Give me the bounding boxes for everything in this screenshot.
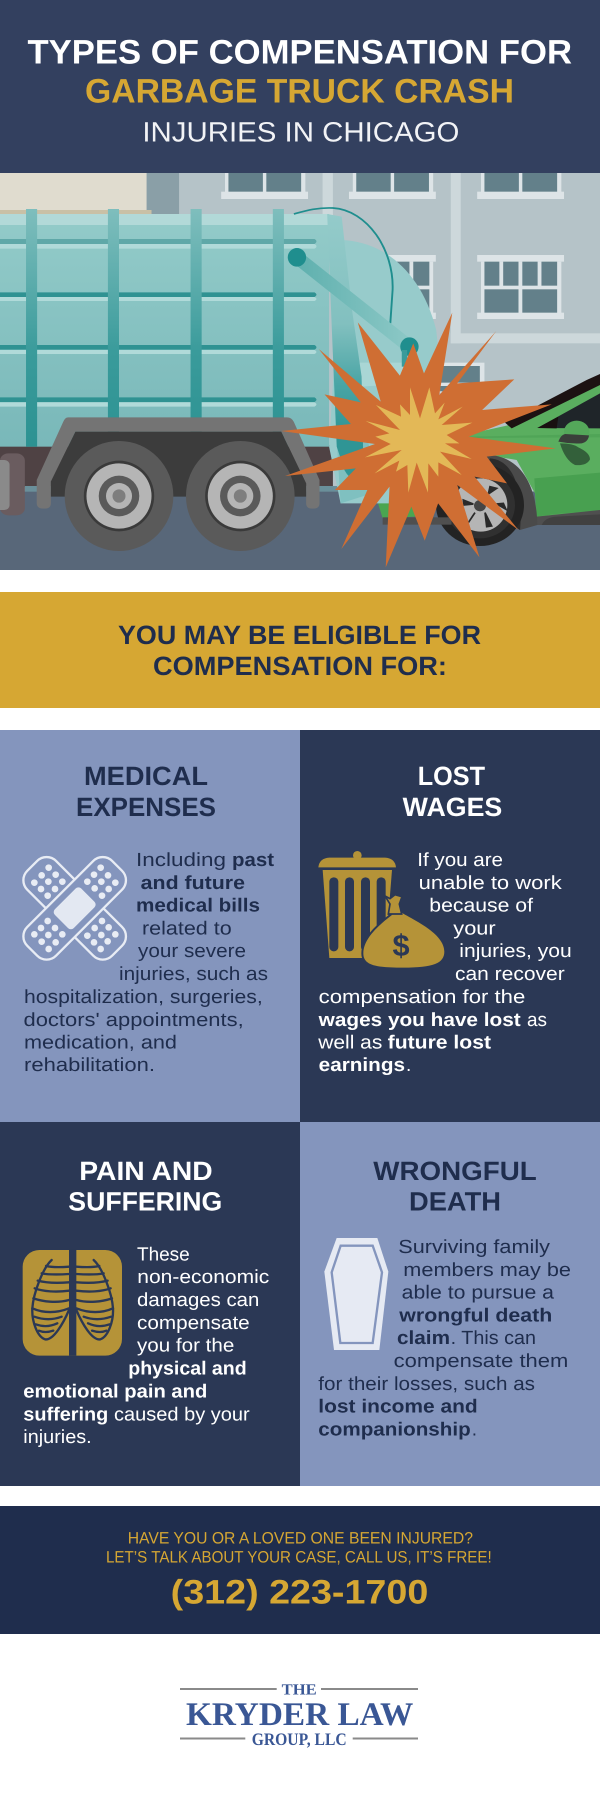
title: GARBAGE TRUCK CRASH bbox=[85, 73, 514, 111]
panel: wrongful death bbox=[300, 1122, 600, 1486]
heading: pain and suffering: SUFFERING bbox=[68, 1187, 222, 1217]
body text: pain and suffering bbox=[23, 1244, 269, 1448]
eligibility banner bbox=[0, 592, 600, 708]
logo: The Kryder Law Group, LLC: KRYDER LAW bbox=[186, 1697, 413, 1733]
heading: wrongful death bbox=[373, 1156, 537, 1217]
building facade and windows bbox=[0, 173, 600, 570]
body text: medical expenses: related to bbox=[142, 918, 232, 939]
body text: lost wages: wages you have lost bbox=[318, 1010, 521, 1031]
icon: trash can and money bag bbox=[318, 851, 444, 968]
body text: lost wages: your bbox=[453, 918, 496, 939]
heading: medical expenses: EXPENSES bbox=[76, 792, 216, 822]
body text: lost wages: because of bbox=[429, 896, 534, 917]
title bbox=[28, 33, 572, 148]
heading: lost wages bbox=[403, 761, 502, 822]
logo: The Kryder Law Group, LLC bbox=[180, 1681, 418, 1749]
call to action panel bbox=[0, 1506, 600, 1634]
icon: trash can and money bag: $ bbox=[392, 929, 410, 963]
body text: lost wages: compensation for the bbox=[319, 987, 525, 1008]
body text: medical expenses: medical bills bbox=[136, 896, 260, 917]
icon: rib cage bbox=[23, 1250, 122, 1356]
title: INJURIES IN CHICAGO bbox=[142, 117, 459, 148]
panel: medical expenses bbox=[0, 730, 300, 1122]
body text: pain and suffering: you for the bbox=[137, 1336, 234, 1357]
road bbox=[0, 492, 600, 570]
body text: pain and suffering: physical and bbox=[128, 1359, 247, 1380]
body text: wrongful death: companionship bbox=[318, 1419, 471, 1440]
body text: pain and suffering: caused by your bbox=[114, 1404, 250, 1425]
body text: medical expenses: rehabilitation. bbox=[24, 1055, 155, 1076]
body text: wrongful death: for their losses, such as bbox=[318, 1374, 535, 1395]
body text: lost wages: If you are bbox=[417, 850, 503, 871]
logo: The Kryder Law Group, LLC: GROUP, LLC bbox=[252, 1729, 347, 1749]
body text: medical expenses: medication, and bbox=[24, 1033, 177, 1054]
panel: pain and suffering bbox=[0, 1122, 300, 1486]
heading: wrongful death: DEATH bbox=[409, 1187, 501, 1217]
body text: pain and suffering: damages can bbox=[137, 1290, 259, 1311]
body text: medical expenses: hospitalization, surgeries, bbox=[24, 987, 263, 1008]
body text: wrongful death: . bbox=[472, 1419, 477, 1440]
heading: lost wages: LOST bbox=[418, 761, 485, 791]
body text: wrongful death: . This can bbox=[451, 1328, 536, 1349]
body text: wrongful death: lost income and bbox=[318, 1397, 478, 1418]
heading: wrongful death: WRONGFUL bbox=[373, 1156, 537, 1186]
eligibility banner: YOU MAY BE ELIGIBLE FOR bbox=[118, 620, 481, 650]
explosion burst outer bbox=[281, 313, 556, 567]
garbage truck bbox=[0, 208, 439, 551]
call to action text: HAVE YOU OR A LOVED ONE BEEN INJURED? bbox=[128, 1529, 473, 1547]
body text: pain and suffering: compensate bbox=[137, 1313, 250, 1334]
phone number: (312) 223-1700 bbox=[171, 1573, 428, 1611]
body text: medical expenses: injuries, such as bbox=[119, 964, 268, 985]
body text: medical expenses: past bbox=[232, 850, 275, 871]
body text: medical expenses: your severe bbox=[138, 941, 246, 962]
body text: lost wages bbox=[317, 850, 572, 1076]
body text: lost wages: future lost bbox=[388, 1033, 492, 1054]
body text: pain and suffering: suffering bbox=[23, 1404, 108, 1425]
eligibility banner: COMPENSATION FOR: bbox=[153, 651, 447, 681]
heading: pain and suffering bbox=[68, 1156, 222, 1217]
hero illustration: garbage truck crash bbox=[0, 173, 600, 570]
body text: wrongful death: compensate them bbox=[394, 1351, 568, 1372]
car front bumper bbox=[378, 498, 452, 525]
heading: pain and suffering: PAIN AND bbox=[79, 1156, 213, 1186]
body text: lost wages: as bbox=[527, 1010, 547, 1031]
title: TYPES OF COMPENSATION FOR bbox=[28, 33, 572, 71]
panel: lost wages bbox=[300, 730, 600, 1122]
icon: crossed bandages bbox=[18, 852, 131, 965]
call to action text bbox=[106, 1529, 492, 1566]
header panel bbox=[0, 0, 600, 173]
heading: lost wages: WAGES bbox=[403, 792, 502, 822]
body text: lost wages: well as bbox=[317, 1033, 382, 1054]
body text: medical expenses: doctors' appointments, bbox=[24, 1010, 244, 1031]
body text: lost wages: injuries, you bbox=[459, 941, 572, 962]
logo: The Kryder Law Group, LLC: THE bbox=[282, 1681, 317, 1698]
body text: medical expenses: and future bbox=[141, 873, 245, 894]
body text: wrongful death: claim bbox=[397, 1328, 450, 1349]
body text: wrongful death: Surviving family bbox=[398, 1237, 551, 1258]
body text: lost wages: . bbox=[406, 1055, 411, 1076]
body text: medical expenses: Including bbox=[136, 850, 226, 871]
body text: pain and suffering: emotional pain and bbox=[23, 1381, 207, 1402]
call to action text: LET’S TALK ABOUT YOUR CASE, CALL US, IT’S FREE! bbox=[106, 1548, 492, 1566]
body text: pain and suffering: non-economic bbox=[137, 1267, 269, 1288]
body text: pain and suffering: injuries. bbox=[23, 1427, 92, 1448]
body text: wrongful death bbox=[318, 1237, 571, 1440]
body text: lost wages: can recover bbox=[455, 964, 565, 985]
car bbox=[397, 374, 600, 546]
body text: medical expenses bbox=[24, 850, 275, 1076]
body text: wrongful death: wrongful death bbox=[398, 1305, 552, 1326]
icon: coffin bbox=[324, 1238, 388, 1350]
heading: medical expenses bbox=[76, 761, 216, 822]
body text: lost wages: earnings bbox=[319, 1055, 405, 1076]
explosion burst inner bbox=[365, 387, 472, 493]
body text: pain and suffering: These bbox=[137, 1244, 190, 1265]
body text: wrongful death: able to pursue a bbox=[402, 1283, 554, 1304]
heading: medical expenses: MEDICAL bbox=[84, 761, 208, 791]
body text: lost wages: unable to work bbox=[419, 873, 562, 894]
body text: wrongful death: members may be bbox=[403, 1260, 571, 1281]
